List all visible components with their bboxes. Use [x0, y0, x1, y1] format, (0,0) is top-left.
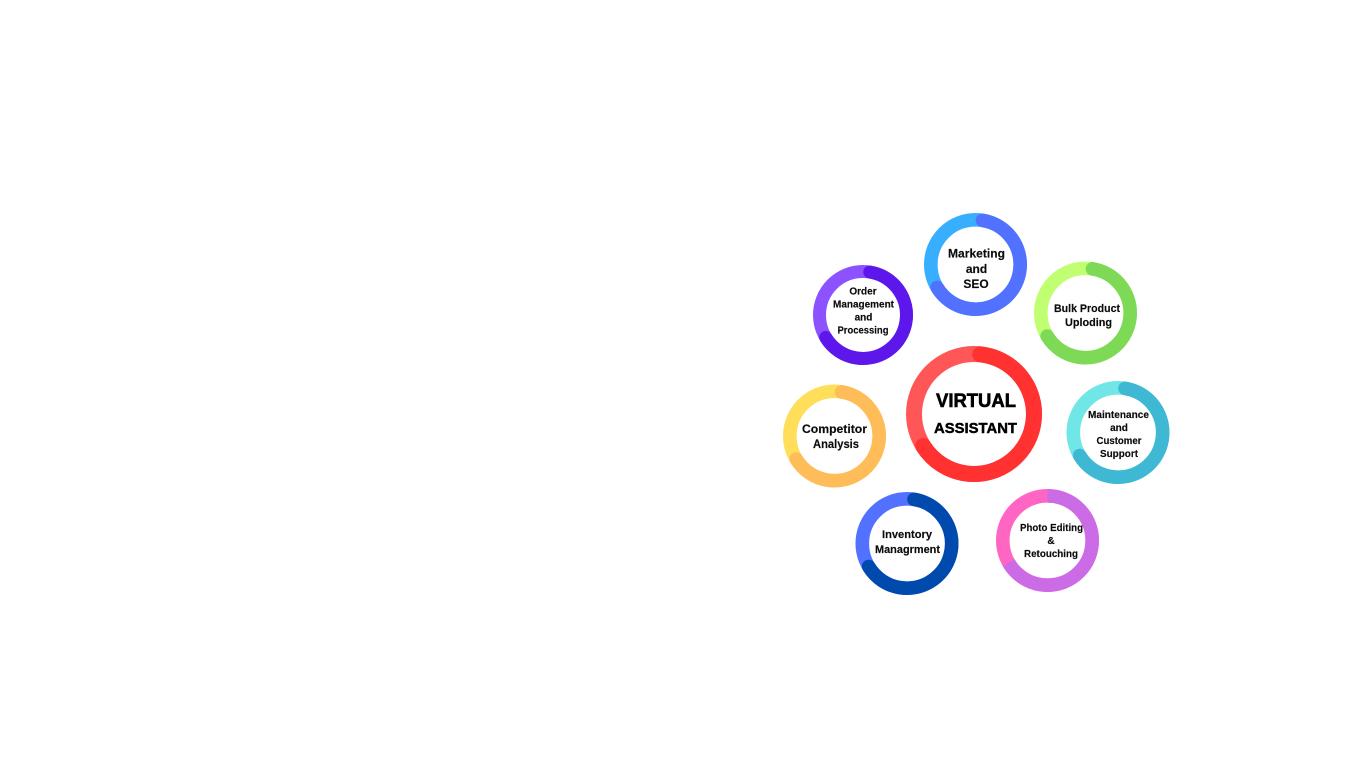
panel: Marketing and SEO	[924, 213, 1027, 316]
panel: Marketing and SEO: and	[966, 262, 987, 276]
panel: Bulk Product Uploding: Bulk Product	[1054, 303, 1120, 315]
panel: Maintenance and Customer Support: Support	[1100, 449, 1139, 460]
panel: Virtual Assistant hub	[908, 348, 1040, 480]
panel: Bulk Product Uploding: Uploding	[1065, 317, 1112, 329]
panel: Order Management and Processing: Management	[833, 300, 895, 310]
panel: Maintenance and Customer Support: Customer	[1096, 436, 1142, 447]
panel: Competitor Analysis	[783, 385, 886, 487]
panel: Virtual Assistant hub: VIRTUAL	[936, 391, 1016, 412]
panel: Photo Editing and Retouching: Retouching	[1024, 549, 1078, 560]
panel: Photo Editing and Retouching: Photo Editing	[1020, 523, 1083, 534]
panel: Competitor Analysis: Analysis	[813, 437, 859, 451]
panel: Order Management and Processing: and	[855, 312, 872, 324]
panel: Marketing and SEO: SEO	[963, 277, 989, 291]
panel: Photo Editing and Retouching	[1003, 496, 1092, 585]
panel: Order Management and Processing: Order	[849, 286, 877, 298]
panel: Maintenance and Customer Support	[1067, 381, 1169, 484]
panel: Competitor Analysis: Competitor	[802, 422, 867, 436]
panel: Maintenance and Customer Support: and	[1110, 423, 1128, 434]
panel: Order Management and Processing	[813, 265, 913, 365]
panel: Virtual Assistant hub: ASSISTANT	[934, 420, 1017, 437]
panel: Photo Editing and Retouching: &	[1047, 536, 1055, 547]
panel: Order Management and Processing: Processing	[838, 326, 888, 336]
panel: Marketing and SEO: Marketing	[948, 246, 1005, 260]
panel: Maintenance and Customer Support: Maintenance	[1088, 410, 1149, 421]
panel: Inventory Managrment	[856, 492, 958, 595]
panel: Bulk Product Uploding	[1034, 262, 1137, 364]
panel: Inventory Managrment: Inventory	[882, 529, 933, 541]
panel: Inventory Managrment: Managrment	[875, 544, 940, 556]
